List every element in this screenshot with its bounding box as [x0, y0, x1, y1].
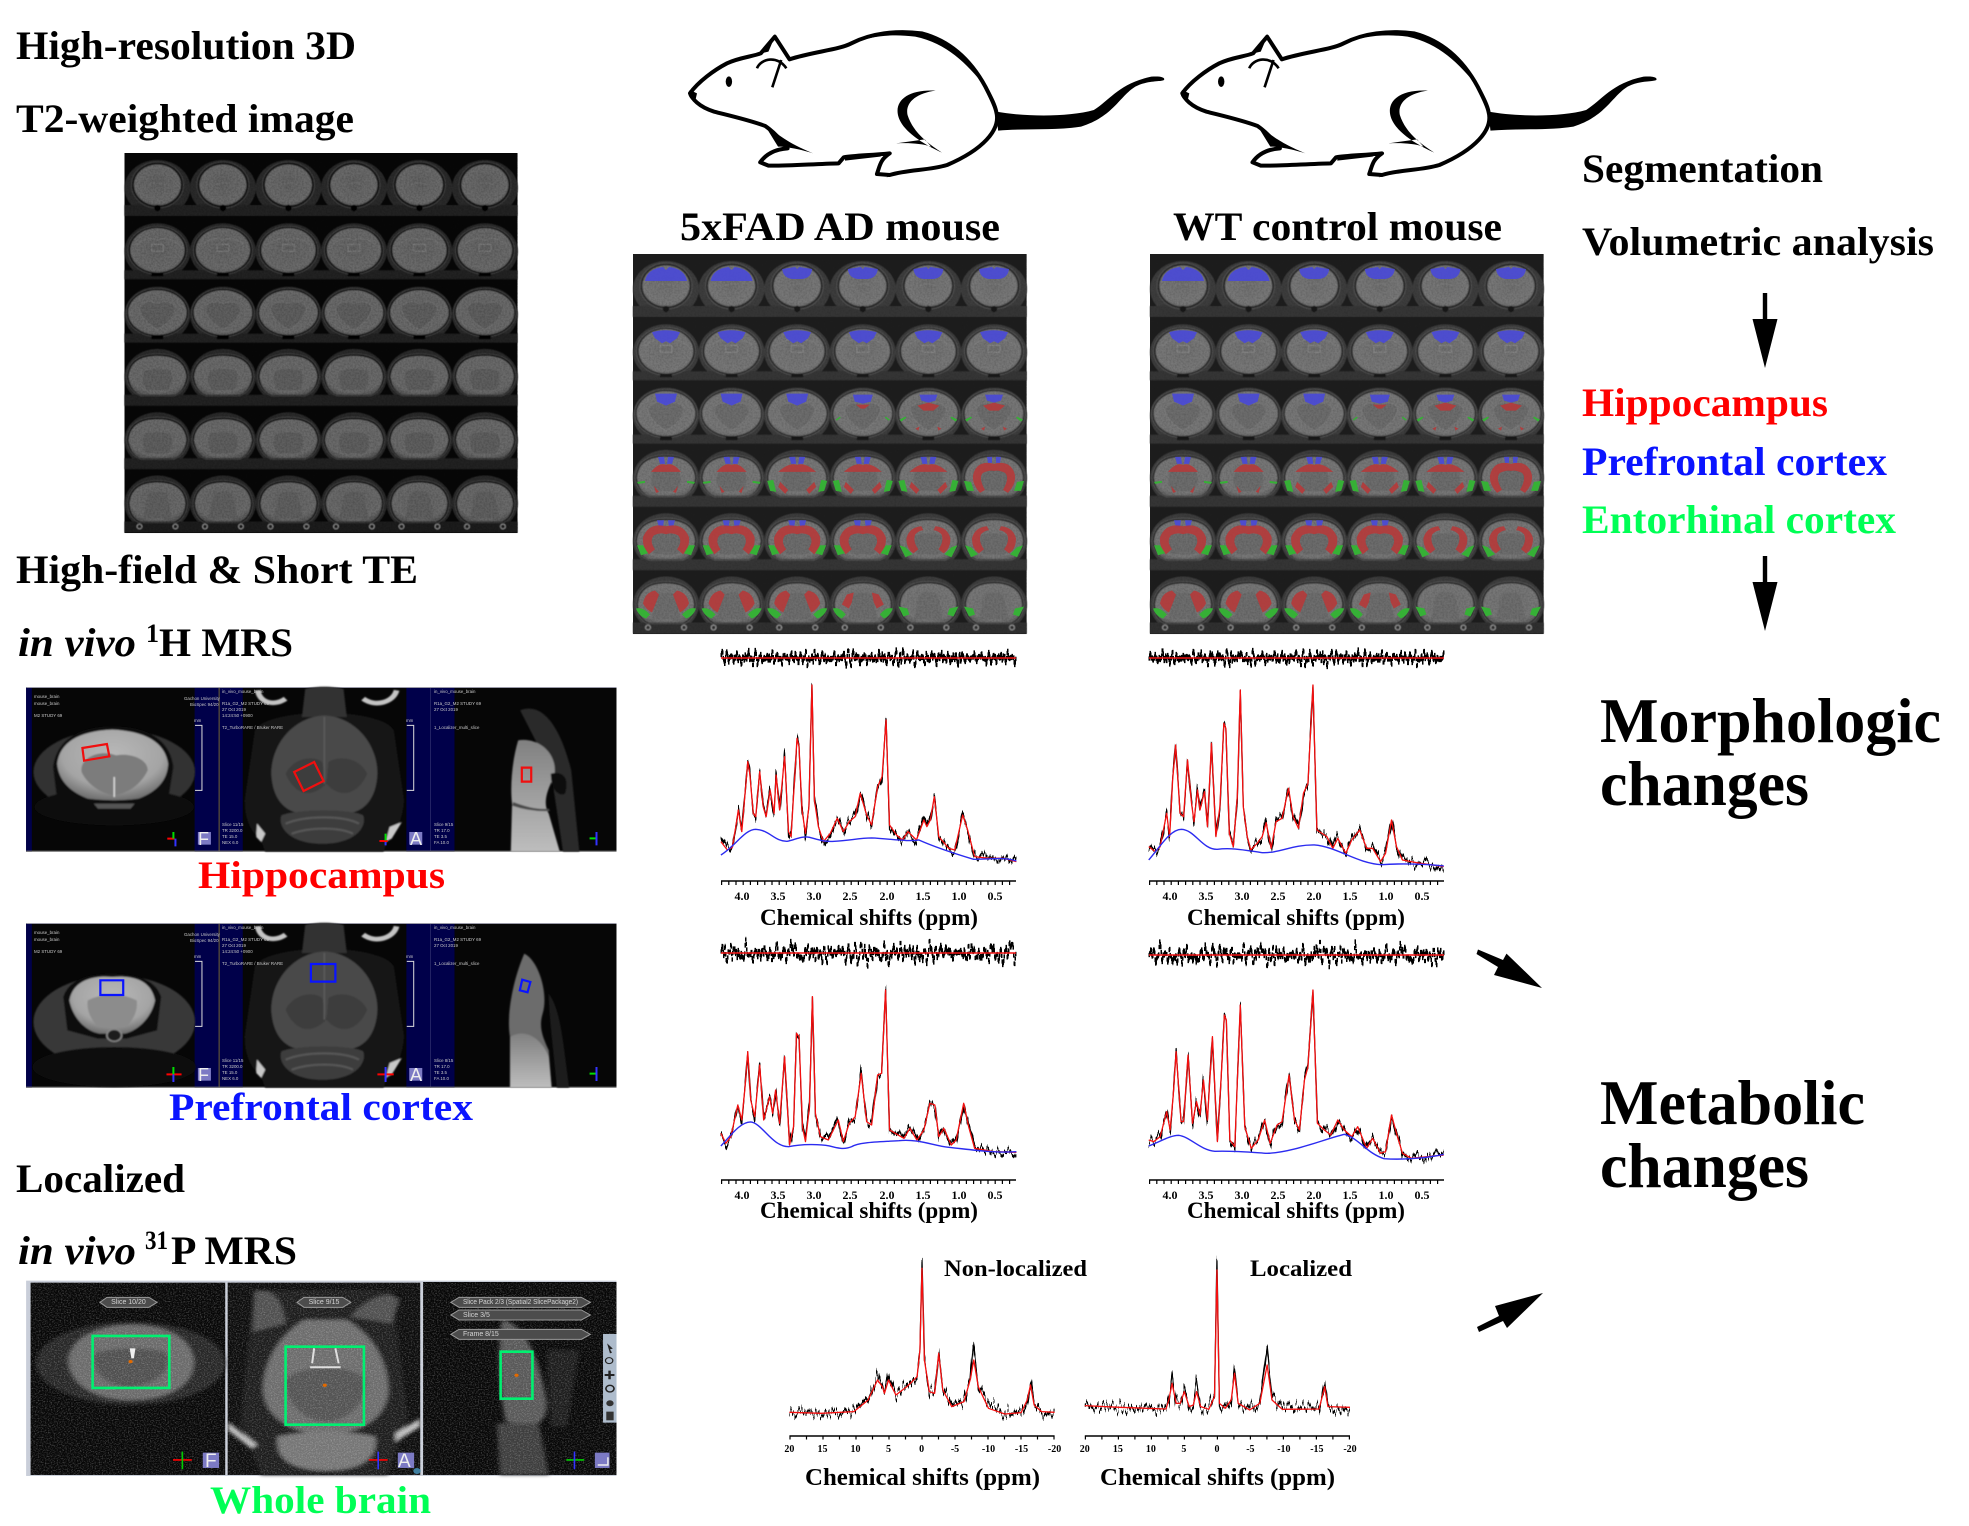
chart: localized 31P spectrum: -20 [1343, 1444, 1357, 1455]
panel: hippocampus voxel localizer images: in_vivo_mouse_brain [222, 689, 264, 694]
text: metabolic changes: changes [1600, 1131, 1809, 1201]
panel: prefrontal cortex voxel localizer images: mouse_brain [34, 937, 60, 942]
panel: segmented MRI montage of the AD mouse [633, 254, 1027, 634]
image: sagittal whole brain slice [497, 1320, 579, 1475]
chart: non-localized 31P spectrum: 5 [886, 1444, 891, 1455]
chart: WT hippocampus 1H spectrum: 0.5 [1414, 889, 1430, 903]
legend: segmented regions [1582, 380, 1896, 542]
panel: hippocampus voxel localizer images: F [198, 829, 209, 849]
chart: WT prefrontal cortex 1H spectrum: 1.5 [1342, 1188, 1358, 1202]
heading: high-field and short TE 1H MRS: 1 [146, 619, 159, 648]
viewer toolbar [603, 1334, 616, 1423]
chart: localized 31P spectrum: -10 [1277, 1444, 1291, 1455]
heading: high-field and short TE 1H MRS: High-field & Short TE [16, 547, 418, 592]
chart: localized 31P spectrum: -15 [1310, 1444, 1324, 1455]
panel: hippocampus voxel localizer images: BioSpec 94/20 [190, 702, 219, 707]
chart: AD prefrontal cortex 1H spectrum: 4.0 [734, 1188, 750, 1202]
panel: prefrontal cortex voxel localizer images: A [410, 1065, 422, 1085]
chart: AD hippocampus 1H spectrum: 2.5 [842, 889, 858, 903]
chart: WT hippocampus 1H spectrum: 2.5 [1270, 889, 1286, 903]
image: coronal view of the prefrontal cortex [33, 974, 196, 1087]
label: prefrontal cortex: Prefrontal cortex [169, 1086, 474, 1129]
heading: high-field and short TE 1H MRS: in vivo [18, 620, 136, 665]
panel: hippocampus voxel localizer images: R1a_G2_M2 STUDY 69 [434, 701, 482, 706]
panel: hippocampus voxel localizer images: Gachon University [184, 696, 221, 701]
panel: prefrontal cortex voxel localizer images: Slice 11/15 [222, 1058, 244, 1063]
label: whole brain: Whole brain [210, 1479, 431, 1522]
panel: prefrontal cortex voxel localizer images: Slice 8/15 [434, 1058, 454, 1063]
panel: prefrontal cortex voxel localizer images: 27 Oct 2019 [222, 943, 246, 948]
chart: non-localized 31P spectrum [784, 1256, 1087, 1491]
chart: AD prefrontal cortex 1H spectrum: 3.5 [770, 1188, 786, 1202]
panel: prefrontal cortex voxel localizer images: BioSpec 94/20 [190, 938, 219, 943]
chart: WT hippocampus 1H spectrum: 4.0 [1162, 889, 1178, 903]
legend: segmented regions: Entorhinal cortex [1582, 497, 1896, 542]
text: morphologic changes: changes [1600, 749, 1809, 819]
chart: WT hippocampus 1H spectrum: 3.0 [1234, 889, 1250, 903]
arrow: down to morphologic changes [1752, 556, 1778, 631]
panel: hippocampus voxel localizer images: in_vivo_mouse_brain [434, 689, 476, 694]
panel: prefrontal cortex voxel localizer images: mouse_brain [34, 930, 60, 935]
panel: whole brain voxel localizer images: Slice 10/20 [111, 1299, 146, 1306]
heading: high-resolution 3D T2-weighted image [16, 23, 356, 141]
chart: non-localized 31P spectrum: -5 [951, 1444, 959, 1455]
chart: AD prefrontal cortex 1H spectrum: 3.0 [806, 1188, 822, 1202]
panel: prefrontal cortex voxel localizer images: TR 17.0 [434, 1064, 450, 1069]
panel: hippocampus voxel localizer images: Slice 9/15 [434, 822, 454, 827]
panel: hippocampus voxel localizer images: TE 15.0 [222, 834, 238, 839]
panel: hippocampus voxel localizer images: TR 3200.0 [222, 828, 243, 833]
chart: WT hippocampus 1H spectrum: 3.5 [1198, 889, 1214, 903]
panel: prefrontal cortex voxel localizer images: M2 STUDY 69 [34, 949, 63, 954]
chart: WT prefrontal cortex 1H spectrum [1149, 955, 1444, 1223]
panel: prefrontal cortex voxel localizer images: F [198, 1065, 209, 1085]
chart: localized 31P spectrum: Localized [1250, 1256, 1352, 1281]
panel: hippocampus voxel localizer images: mm [406, 718, 414, 723]
voxel boxes: prefrontal cortex region [100, 964, 530, 995]
text: segmentation and volumetric analysis [1582, 146, 1934, 264]
chart: AD prefrontal cortex 1H spectrum: 0.5 [988, 1188, 1002, 1202]
panel: prefrontal cortex voxel localizer images: 27 Oct 2019 [434, 943, 458, 948]
chart: AD hippocampus 1H spectrum: 3.5 [770, 889, 786, 903]
image: coronal view of the hippocampus [33, 726, 195, 825]
image: sagittal view of the prefrontal cortex [509, 954, 569, 1088]
chart: localized 31P spectrum: -5 [1246, 1444, 1255, 1455]
chart: localized 31P spectrum: Chemical shifts (ppm) [1100, 1465, 1335, 1491]
panel: hippocampus voxel localizer images: R1a_G2_M2 STUDY 69 [222, 701, 270, 706]
chart: AD hippocampus 1H spectrum: Chemical shifts (ppm) [760, 905, 978, 930]
chart: AD hippocampus 1H spectrum: 1.5 [916, 889, 930, 903]
panel: whole brain voxel localizer images: A [398, 1451, 411, 1472]
panel: whole brain voxel localizer images: F [205, 1451, 217, 1472]
chart: localized 31P spectrum: 20 [1080, 1444, 1090, 1455]
panel: prefrontal cortex voxel localizer images: TR 3200.0 [222, 1064, 243, 1069]
panel: prefrontal cortex voxel localizer images: NEX 6.0 [222, 1076, 239, 1081]
heading: high-resolution 3D T2-weighted image: High-resolution 3D [16, 23, 356, 68]
text: morphologic changes [1600, 686, 1941, 819]
panel: whole brain voxel localizer images: Slice 9/15 [309, 1299, 339, 1306]
panel: whole brain voxel localizer images [26, 1281, 616, 1476]
chart: AD prefrontal cortex 1H spectrum: Chemical shifts (ppm) [760, 1198, 978, 1223]
label: hippocampus: Hippocampus [198, 854, 445, 897]
panel: prefrontal cortex voxel localizer images: R1a_G2_M2 STUDY 69 [222, 937, 270, 942]
chart: WT hippocampus 1H spectrum: Chemical shifts (ppm) [1187, 905, 1405, 930]
heading: WT control mouse: WT control mouse [1173, 204, 1502, 249]
panel: hippocampus voxel localizer images: 1_Localizer_multi_slice [434, 725, 480, 730]
text: metabolic changes [1600, 1068, 1865, 1201]
panel: prefrontal cortex voxel localizer images: R1a_G2_M2 STUDY 69 [434, 937, 482, 942]
heading: localized in vivo 31P MRS: in vivo [18, 1228, 136, 1273]
orientation markers [167, 832, 596, 846]
heading: high-resolution 3D T2-weighted image: T2-weighted image [16, 96, 354, 141]
chart: WT hippocampus 1H spectrum: 1.5 [1342, 889, 1358, 903]
chart: localized 31P spectrum: 10 [1146, 1444, 1156, 1455]
panel: prefrontal cortex voxel localizer images: mm [194, 954, 202, 959]
panel: prefrontal cortex voxel localizer images: in_vivo_mouse_brain [434, 925, 476, 930]
text: segmentation and volumetric analysis: Volumetric analysis [1582, 219, 1934, 264]
panel: T2-weighted MRI montage [124, 153, 518, 533]
arrow: down to regions [1752, 293, 1778, 368]
legend: segmented regions: Hippocampus [1582, 380, 1828, 425]
chart: non-localized 31P spectrum: 10 [850, 1444, 860, 1455]
icon: WT mouse [1181, 32, 1657, 177]
panel: hippocampus voxel localizer images: A [410, 829, 422, 849]
panel: hippocampus voxel localizer images: 14:24:50 +0900 [222, 713, 253, 718]
panel: prefrontal cortex voxel localizer images: in_vivo_mouse_brain [222, 925, 264, 930]
chart: WT prefrontal cortex 1H spectrum: 2.0 [1306, 1188, 1322, 1202]
panel: hippocampus voxel localizer images: 27 Oct 2019 [222, 707, 246, 712]
chart: AD hippocampus 1H spectrum: 3.0 [806, 889, 822, 903]
chart: AD hippocampus 1H spectrum: 2.0 [880, 889, 894, 903]
chart: AD hippocampus 1H spectrum [721, 658, 1016, 930]
chart: non-localized 31P spectrum: Non-localized [944, 1256, 1087, 1281]
panel: hippocampus voxel localizer images [26, 687, 616, 852]
chart: WT prefrontal cortex 1H spectrum: 1.0 [1378, 1188, 1394, 1202]
chart: AD hippocampus 1H spectrum: 0.5 [988, 889, 1002, 903]
chart: non-localized 31P spectrum: -20 [1048, 1444, 1061, 1455]
chart: localized 31P spectrum: 15 [1113, 1444, 1123, 1455]
text: morphologic changes: Morphologic [1600, 686, 1941, 756]
image: coronal whole brain slice [228, 1290, 420, 1475]
image: axial view of the prefrontal cortex [245, 923, 404, 1088]
chart: WT prefrontal cortex 1H spectrum: 4.0 [1162, 1188, 1178, 1202]
panel: hippocampus voxel localizer images: TR 17.0 [434, 828, 450, 833]
panel: hippocampus voxel localizer images: mouse_brain [34, 701, 60, 706]
chart: AD prefrontal cortex 1H spectrum: 2.0 [880, 1188, 894, 1202]
chart: WT prefrontal cortex 1H spectrum: 0.5 [1414, 1188, 1430, 1202]
chart: non-localized 31P spectrum: -10 [982, 1444, 995, 1455]
chart: AD prefrontal cortex 1H spectrum: 2.5 [842, 1188, 858, 1202]
legend: segmented regions: Prefrontal cortex [1582, 439, 1887, 484]
heading: high-field and short TE 1H MRS: H MRS [159, 620, 293, 665]
panel: prefrontal cortex voxel localizer images: Gachon University [184, 932, 221, 937]
orientation markers and view letters [173, 1452, 610, 1474]
panel: prefrontal cortex voxel localizer images: 14:24:50 +0900 [222, 949, 253, 954]
panel: prefrontal cortex voxel localizer images [26, 923, 616, 1088]
panel: hippocampus voxel localizer images: TE 3.5 [434, 834, 447, 839]
chart: non-localized 31P spectrum: -15 [1015, 1444, 1028, 1455]
panel: whole brain voxel localizer images: Frame 8/15 [463, 1331, 499, 1338]
panel: hippocampus voxel localizer images: Slice 11/15 [222, 822, 244, 827]
icon: 5xFAD mouse [688, 32, 1164, 177]
panel: hippocampus voxel localizer images: mm [194, 718, 202, 723]
heading: 5xFAD AD mouse: 5xFAD AD mouse [680, 204, 1000, 249]
heading: localized in vivo 31P MRS [16, 1156, 297, 1273]
chart: non-localized 31P spectrum: 0 [919, 1444, 924, 1455]
image: sagittal view of the hippocampus [511, 709, 579, 852]
panel: prefrontal cortex voxel localizer images: mm [406, 954, 414, 959]
slice label pills [100, 1297, 590, 1339]
text: segmentation and volumetric analysis: Segmentation [1582, 146, 1823, 191]
panel: prefrontal cortex voxel localizer images: TE 15.0 [222, 1070, 238, 1075]
chart: WT hippocampus 1H spectrum: 2.0 [1306, 889, 1322, 903]
heading: localized in vivo 31P MRS: Localized [16, 1156, 185, 1201]
chart: WT prefrontal cortex 1H spectrum: Chemical shifts (ppm) [1187, 1198, 1405, 1223]
heading: localized in vivo 31P MRS: P MRS [171, 1228, 297, 1273]
panel: whole brain voxel localizer images: Slice Pack 2/3 (Spatial2 SlicePackage2) [463, 1299, 578, 1306]
chart: AD prefrontal cortex 1H spectrum [721, 953, 1016, 1223]
orientation markers [166, 1067, 596, 1082]
voxel boxes: whole brain region [93, 1336, 532, 1425]
chart: non-localized 31P spectrum: 15 [818, 1444, 828, 1455]
chart: WT prefrontal cortex 1H spectrum: 2.5 [1270, 1188, 1286, 1202]
panel: prefrontal cortex voxel localizer images: 1_Localizer_multi_slice [434, 961, 480, 966]
arrow: diagonal to metabolic changes from above [1476, 950, 1542, 988]
chart: localized 31P spectrum [1080, 1256, 1357, 1491]
panel: hippocampus voxel localizer images: T2_TurboRARE / Bruker RARE [222, 725, 283, 730]
chart: localized 31P spectrum: 5 [1181, 1444, 1186, 1455]
panel: hippocampus voxel localizer images: 27 Oct 2019 [434, 707, 458, 712]
text: metabolic changes: Metabolic [1600, 1068, 1865, 1138]
chart: localized 31P spectrum: 0 [1214, 1444, 1220, 1455]
panel: hippocampus voxel localizer images: M2 STUDY 69 [34, 713, 63, 718]
panel: prefrontal cortex voxel localizer images: FA 10.0 [434, 1076, 449, 1081]
image: axial whole brain slice [36, 1322, 225, 1405]
panel: hippocampus voxel localizer images: NEX 6.0 [222, 840, 239, 845]
panel: prefrontal cortex voxel localizer images: TE 3.5 [434, 1070, 447, 1075]
heading: localized in vivo 31P MRS: 31 [145, 1226, 168, 1255]
image: axial view of the hippocampus [245, 687, 404, 852]
chart: AD prefrontal cortex 1H spectrum: 1.5 [916, 1188, 930, 1202]
chart: WT prefrontal cortex 1H spectrum: 3.5 [1198, 1188, 1214, 1202]
chart: WT hippocampus 1H spectrum: 1.0 [1378, 889, 1394, 903]
chart: non-localized 31P spectrum: Chemical shifts (ppm) [805, 1465, 1040, 1491]
panel: segmented MRI montage of the WT mouse [1150, 254, 1544, 634]
chart: WT prefrontal cortex 1H spectrum: 3.0 [1234, 1188, 1250, 1202]
isocenter dots [129, 1360, 519, 1387]
panel: hippocampus voxel localizer images: mouse_brain [34, 694, 60, 699]
chart: AD hippocampus 1H spectrum: 4.0 [734, 889, 750, 903]
heading: high-field and short TE 1H MRS [16, 547, 418, 665]
chart: non-localized 31P spectrum: 20 [784, 1444, 794, 1455]
panel: hippocampus voxel localizer images: FA 10.0 [434, 840, 449, 845]
chart: AD prefrontal cortex 1H spectrum: 1.0 [952, 1188, 966, 1202]
panel: whole brain voxel localizer images: Slice 3/5 [463, 1312, 490, 1319]
arrow: diagonal to metabolic changes from below [1477, 1293, 1543, 1332]
chart: WT hippocampus 1H spectrum [1149, 658, 1444, 930]
panel: prefrontal cortex voxel localizer images: T2_TurboRARE / Bruker RARE [222, 961, 283, 966]
chart: AD hippocampus 1H spectrum: 1.0 [952, 889, 966, 903]
voxel boxes: hippocampus region [82, 744, 531, 791]
